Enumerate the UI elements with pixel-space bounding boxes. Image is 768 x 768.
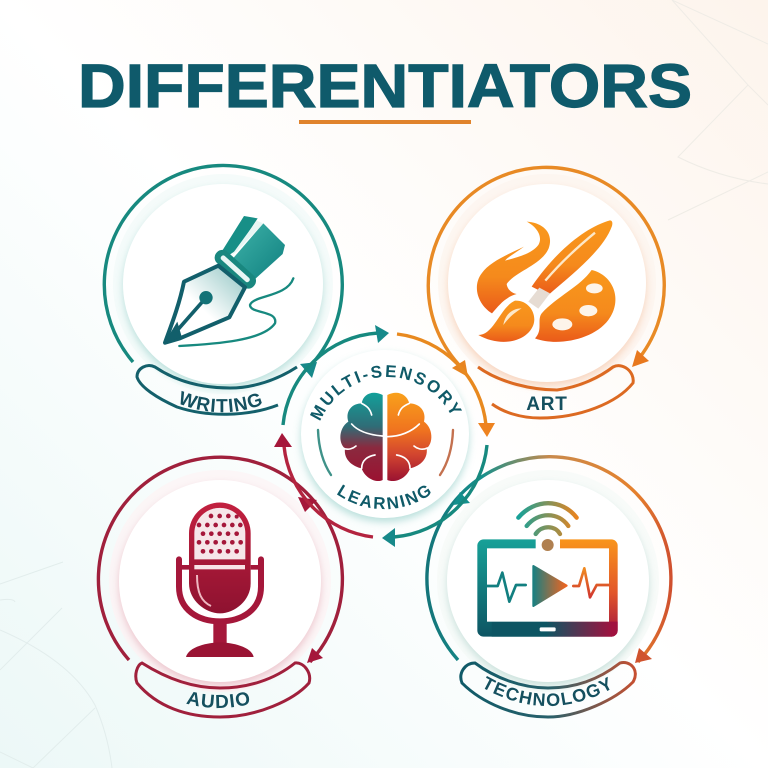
audio ring arrowhead	[307, 648, 323, 663]
writing ring arrow	[104, 165, 342, 371]
panel: technology	[425, 455, 673, 718]
audio ring arrow	[98, 457, 342, 662]
icon: fountain pen	[164, 216, 293, 346]
center heading bottom: LEARNING	[337, 484, 431, 510]
art ring arrowhead right	[632, 350, 649, 367]
technology ring arrowhead	[635, 648, 652, 663]
writing label: WRITING	[180, 390, 262, 412]
center heading top: MULTI-SENSORY	[310, 365, 462, 421]
icon: brain	[340, 393, 431, 481]
icon: brush and palette	[477, 220, 615, 342]
center arrow: teal top-left	[283, 325, 389, 425]
center arrow: teal bottom-right	[382, 445, 487, 547]
technology label tag	[461, 662, 635, 717]
icon: tablet with wifi and play	[477, 503, 618, 637]
art label: ART	[526, 394, 568, 415]
center arrow: crimson bottom-left	[274, 433, 373, 537]
writing label tag	[137, 366, 297, 414]
panel: audio	[96, 456, 344, 718]
writing ring arrowhead	[300, 362, 317, 378]
center side arc right	[440, 430, 453, 475]
audio label tag	[136, 663, 310, 717]
title: DIFFERENTIATORS	[78, 52, 692, 121]
technology upper arrowhead	[453, 492, 470, 505]
panel: art	[428, 167, 664, 418]
icon: microphone	[179, 502, 261, 657]
art label tag	[478, 366, 633, 418]
center side arc left	[318, 430, 331, 475]
technology ring arrow	[427, 457, 671, 662]
center arrow: orange top-right	[397, 334, 495, 437]
title underline	[299, 120, 471, 124]
art ring arrow	[428, 167, 664, 368]
art ring arrowhead left	[452, 360, 468, 377]
audio label: AUDIO	[186, 692, 250, 708]
panel: writing	[102, 164, 344, 416]
technology label: TECHNOLOGY	[484, 676, 610, 706]
panel: multi-sensory learning center	[274, 325, 495, 547]
audio upper arrowhead	[298, 497, 317, 512]
